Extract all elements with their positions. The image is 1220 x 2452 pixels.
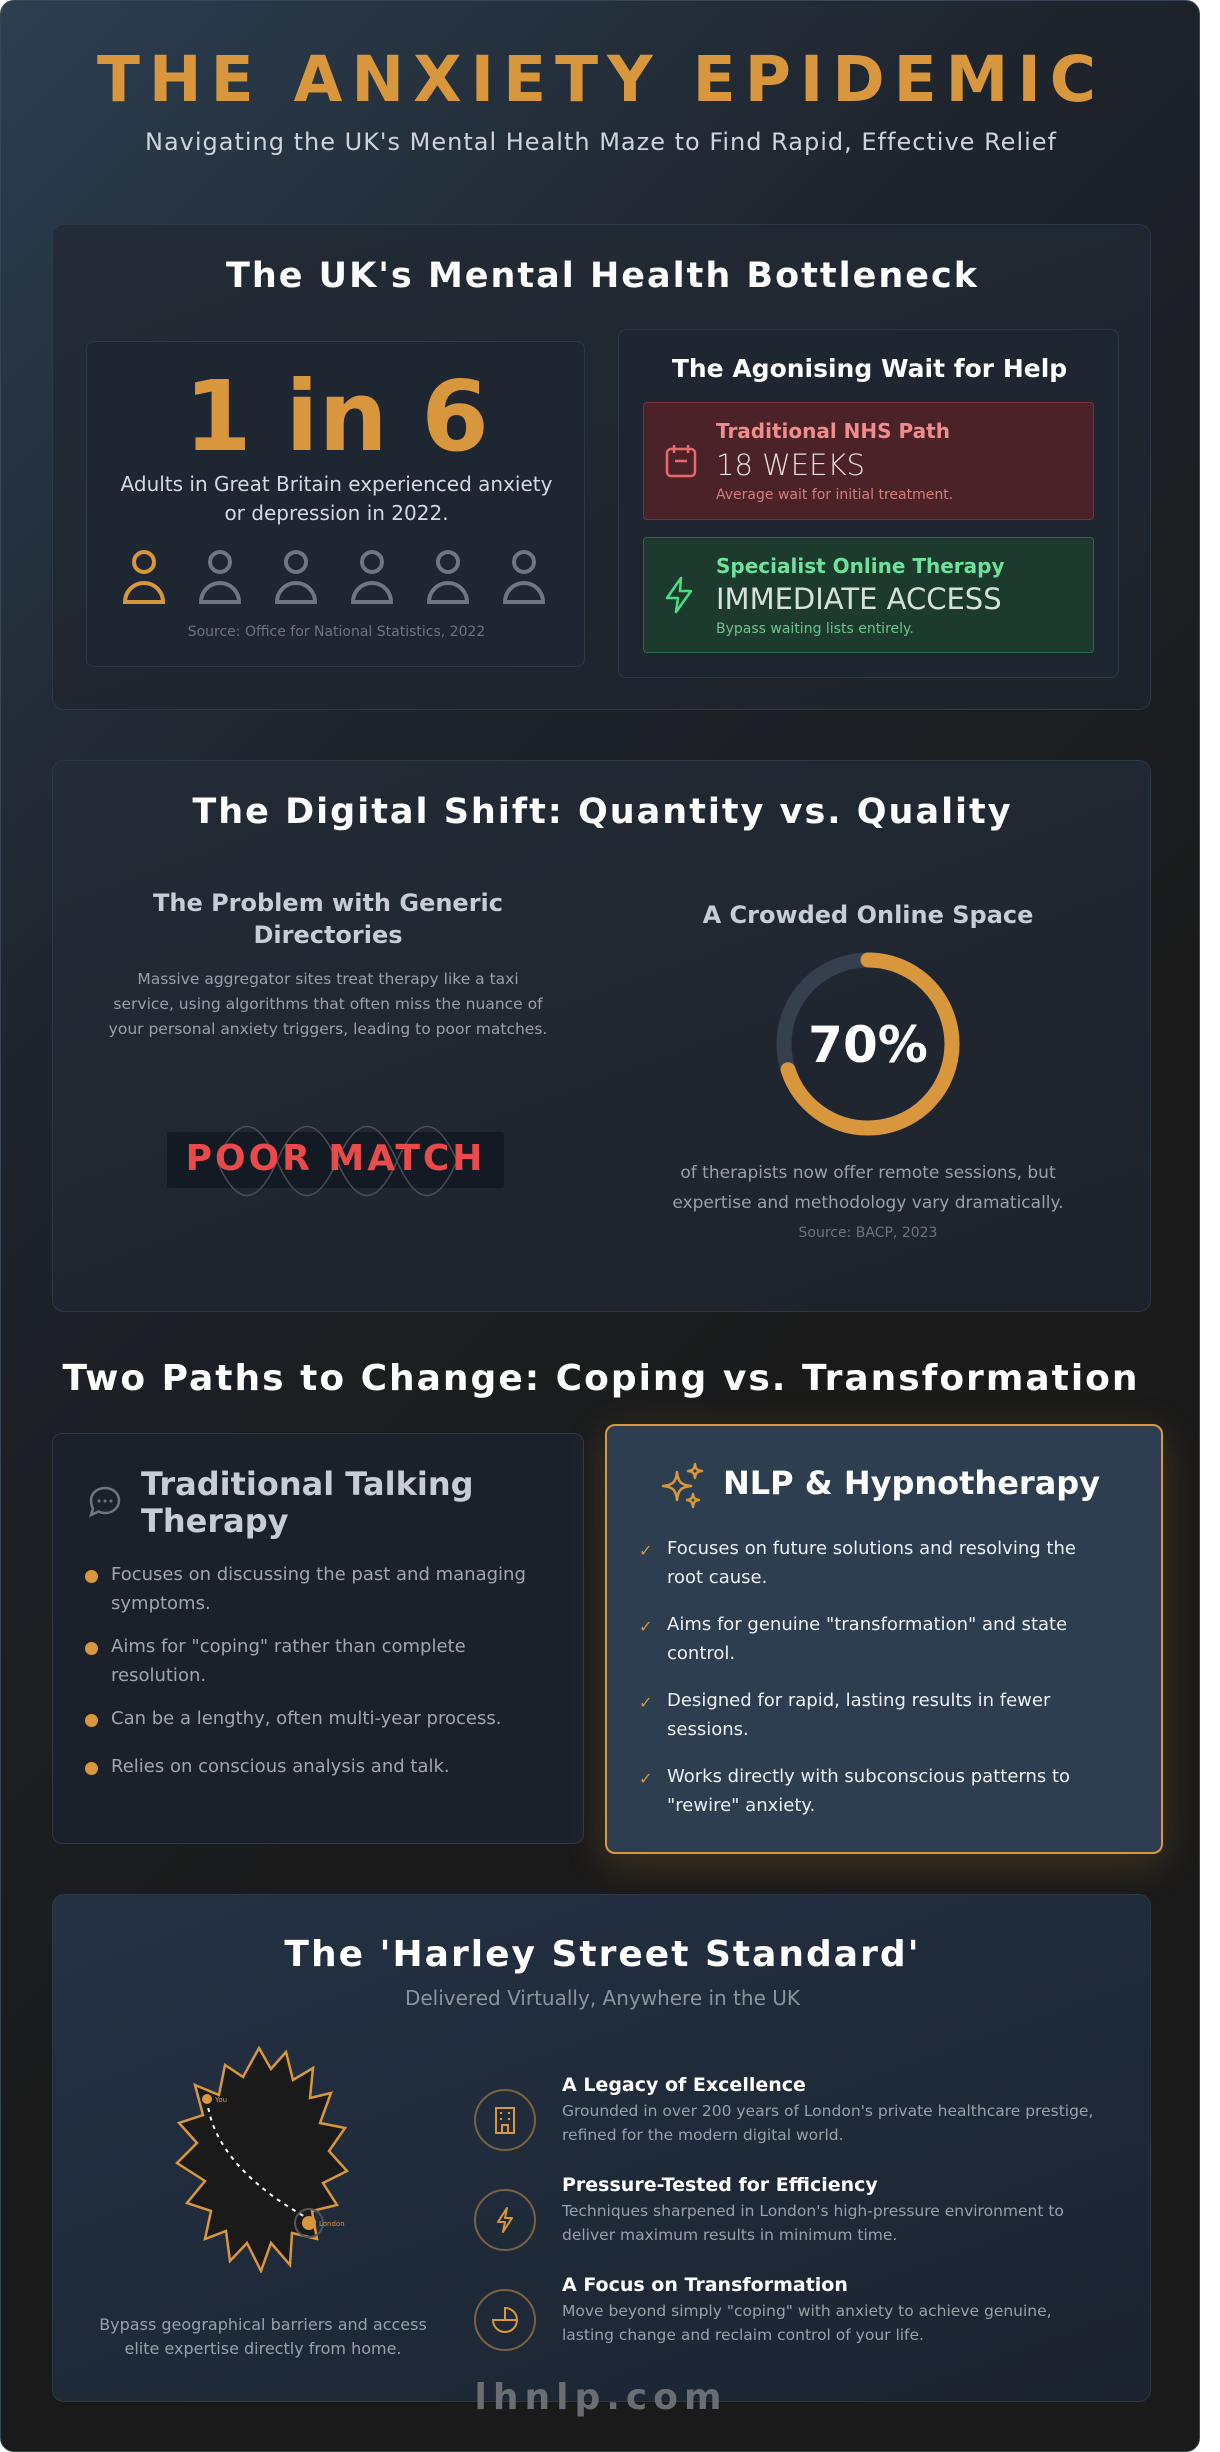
card: 1 in 6 — [86, 341, 585, 667]
caption — [672, 1163, 1064, 1213]
donut chart: 70%: 70% — [808, 1016, 928, 1074]
subheading: The Problem with Generic Directories — [153, 889, 503, 949]
box: NHS path — [643, 402, 1094, 520]
list: Designed for rapid, lasting results in fewer sessions. — [667, 1690, 1050, 1740]
list: Can be a lengthy, often multi-year process. — [111, 1708, 501, 1729]
watermark: lhnlp.com — [475, 2377, 727, 2418]
icon: lightning — [666, 576, 692, 614]
feature: transformation: A Focus on Transformation — [562, 2274, 848, 2296]
list: ✓ — [639, 1769, 652, 1788]
source: Source: BACP, 2023 — [799, 1225, 937, 1241]
description: Massive aggregator sites treat therapy like a taxi — [137, 970, 519, 988]
card title — [141, 1465, 474, 1540]
feature: legacy: A Legacy of Excellence — [562, 2074, 806, 2096]
box: online therapy — [643, 537, 1094, 653]
heading: digital shift: The Digital Shift: Quantity vs. Quality — [192, 792, 1013, 832]
box: online therapy: IMMEDIATE ACCESS — [716, 582, 1002, 616]
heading: wait: The Agonising Wait for Help — [672, 354, 1067, 383]
feature: efficiency: Pressure-Tested for Efficiency — [562, 2174, 878, 2196]
box: online therapy: Bypass waiting lists entirely. — [716, 621, 914, 637]
list — [85, 1564, 526, 1777]
description: service, using algorithms that often miss the nuance of — [113, 995, 543, 1013]
panel: digital shift — [52, 760, 1151, 1312]
feature: efficiency — [474, 2174, 1064, 2251]
map caption: Bypass geographical barriers and access elite expertise directly from home. — [99, 2315, 427, 2358]
list: Works directly with subconscious patterns to "rewire" anxiety. — [667, 1766, 1070, 1816]
list: ✓ — [639, 1541, 652, 1560]
icon: sparkles — [662, 1462, 704, 1508]
icon: building — [474, 2089, 536, 2151]
box: NHS path: Traditional NHS Path — [716, 419, 950, 443]
stat description: Adults in Great Britain experienced anxiety — [121, 472, 552, 496]
icon: bolt — [474, 2189, 536, 2251]
box: online therapy: Specialist Online Therapy — [716, 554, 1005, 578]
description: your personal anxiety triggers, leading to poor matches. — [109, 1020, 547, 1038]
box: NHS path: 18 WEEKS — [716, 448, 865, 482]
icon: chat bubble — [89, 1486, 120, 1518]
list: Focuses on future solutions and resolving the root cause. — [667, 1538, 1076, 1588]
caption: expertise and methodology vary dramatically. — [672, 1193, 1064, 1213]
list — [639, 1538, 1076, 1816]
card title: Traditional Talking — [141, 1465, 474, 1503]
subheading: A Crowded Online Space — [703, 901, 1033, 929]
list: Relies on conscious analysis and talk. — [111, 1756, 450, 1777]
card: wait for help — [618, 329, 1119, 678]
icon row: people — [123, 550, 545, 604]
list: ✓ — [639, 1693, 652, 1712]
badge: poor match — [167, 1126, 504, 1196]
card: NLP & hypnotherapy — [605, 1424, 1163, 1854]
panel: bottleneck — [52, 224, 1151, 710]
list: Focuses on discussing the past and managing symptoms. — [111, 1564, 526, 1614]
card: traditional talking therapy — [52, 1433, 584, 1844]
feature: transformation: Move beyond simply "coping" with anxiety to achieve genuine, lasting change and reclaim control of your life. — [562, 2302, 1052, 2344]
title: THE ANXIETY EPIDEMIC — [97, 43, 1105, 116]
list: Aims for genuine "transformation" and state control. — [667, 1614, 1067, 1664]
box: NHS path: Average wait for initial treatment. — [716, 487, 953, 503]
subheading: Delivered Virtually, Anywhere in the UK — [405, 1986, 800, 2010]
subtitle: Navigating the UK's Mental Health Maze to Find Rapid, Effective Relief — [145, 128, 1057, 156]
block: generic directories — [109, 889, 547, 1196]
feature list — [474, 2074, 1093, 2351]
card title: NLP & Hypnotherapy — [723, 1464, 1100, 1502]
map: UK with route — [175, 2046, 349, 2273]
heading: bottleneck: The UK's Mental Health Bottleneck — [226, 256, 979, 296]
heading: harley street: The 'Harley Street Standard' — [284, 1934, 921, 1975]
list: Aims for "coping" rather than complete resolution. — [111, 1636, 466, 1686]
badge: poor match: POOR MATCH — [186, 1138, 485, 1179]
donut chart: 70% — [776, 952, 960, 1136]
card title: Therapy — [141, 1502, 288, 1540]
icon: calendar — [666, 445, 696, 478]
stat description — [120, 472, 552, 525]
list: ✓ — [639, 1617, 652, 1636]
map: UK with route: London — [319, 2220, 345, 2228]
stat description: or depression in 2022. — [224, 501, 449, 525]
panel: harley street — [52, 1894, 1151, 2402]
big stat: 1 in 6 — [184, 360, 489, 473]
feature: legacy: Grounded in over 200 years of London's private healthcare prestige, refined for the modern digital world. — [562, 2102, 1093, 2144]
block: crowded online space — [672, 901, 1064, 1241]
icon: pie — [474, 2289, 536, 2351]
description — [109, 970, 547, 1038]
feature: transformation — [474, 2274, 1052, 2351]
caption: of therapists now offer remote sessions, but — [680, 1163, 1056, 1183]
heading: two paths: Two Paths to Change: Coping vs. Transformation — [62, 1358, 1140, 1399]
map: UK with route: You — [214, 2096, 227, 2104]
source: Source: Office for National Statistics, 2022 — [188, 624, 485, 640]
feature: legacy — [474, 2074, 1093, 2151]
feature: efficiency: Techniques sharpened in London's high-pressure environment to deliver maximum results in minimum time. — [562, 2202, 1064, 2244]
